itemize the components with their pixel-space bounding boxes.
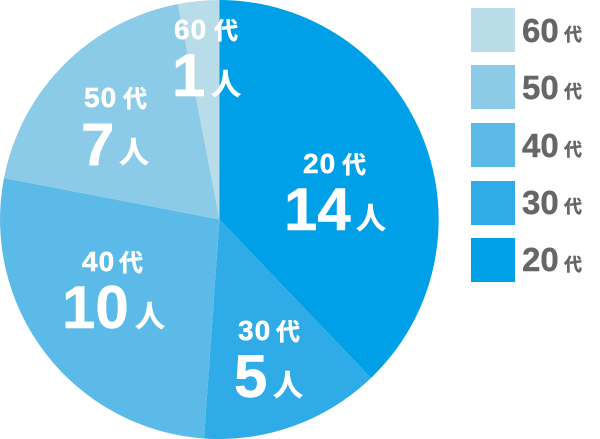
- legend item: 30s: 代: [564, 197, 582, 217]
- slice: 60s: [178, 0, 220, 220]
- legend item: 50s: [471, 65, 582, 109]
- slice: 50s: [4, 4, 220, 220]
- legend item: 20s: 代: [564, 255, 582, 275]
- legend item: 60s: 60: [522, 12, 559, 49]
- slice: 20s: [220, 0, 439, 378]
- label: 30s, 5 people: 人: [273, 370, 303, 403]
- label: 30s, 5 people: [234, 315, 303, 410]
- legend item: 60s: 代: [564, 25, 582, 45]
- label: 50s, 7 people: [81, 82, 149, 178]
- label: 20s, 14 people: 20: [303, 148, 336, 179]
- slice: 40s: [0, 178, 220, 438]
- legend item: 20s: [471, 238, 582, 282]
- label: 40s, 10 people: 40: [82, 246, 115, 277]
- label: 50s, 7 people: 50: [84, 82, 117, 113]
- legend item: 40s: 40: [522, 127, 559, 164]
- label: 20s, 14 people: 人: [356, 203, 386, 236]
- legend item: 60s: [471, 8, 582, 52]
- label: 50s, 7 people: 人: [119, 137, 149, 170]
- label: 40s, 10 people: 10: [62, 274, 129, 341]
- legend item: 50s: 50: [522, 69, 559, 106]
- label: 60s, 1 person: 1: [172, 42, 205, 109]
- label: 40s, 10 people: 人: [135, 301, 165, 334]
- legend item: 20s: 20: [522, 241, 559, 278]
- label: 20s, 14 people: 14: [284, 176, 351, 243]
- slice: 30s: [204, 220, 371, 439]
- label: 50s, 7 people: 代: [123, 86, 147, 113]
- label: 30s, 5 people: 5: [234, 343, 267, 410]
- label: 40s, 10 people: 代: [119, 250, 143, 277]
- label: 20s, 14 people: [284, 148, 386, 243]
- legend: [471, 8, 582, 282]
- label: 30s, 5 people: 30: [238, 315, 271, 346]
- label: 60s, 1 person: [172, 14, 241, 109]
- legend item: 30s: 30: [522, 184, 559, 221]
- legend item: 40s: [471, 123, 582, 167]
- label: 30s, 5 people: 代: [276, 319, 300, 346]
- legend item: 30s: [471, 181, 582, 225]
- label: 50s, 7 people: 7: [81, 111, 114, 178]
- label: 60s, 1 person: 60: [174, 14, 207, 45]
- label: 40s, 10 people: [62, 246, 165, 341]
- label: 20s, 14 people: 代: [342, 152, 366, 179]
- legend item: 50s: 代: [564, 82, 582, 102]
- label: 60s, 1 person: 人: [211, 69, 241, 102]
- pie chart: [0, 0, 439, 439]
- legend item: 40s: 代: [564, 140, 582, 160]
- label: 60s, 1 person: 代: [214, 18, 238, 45]
